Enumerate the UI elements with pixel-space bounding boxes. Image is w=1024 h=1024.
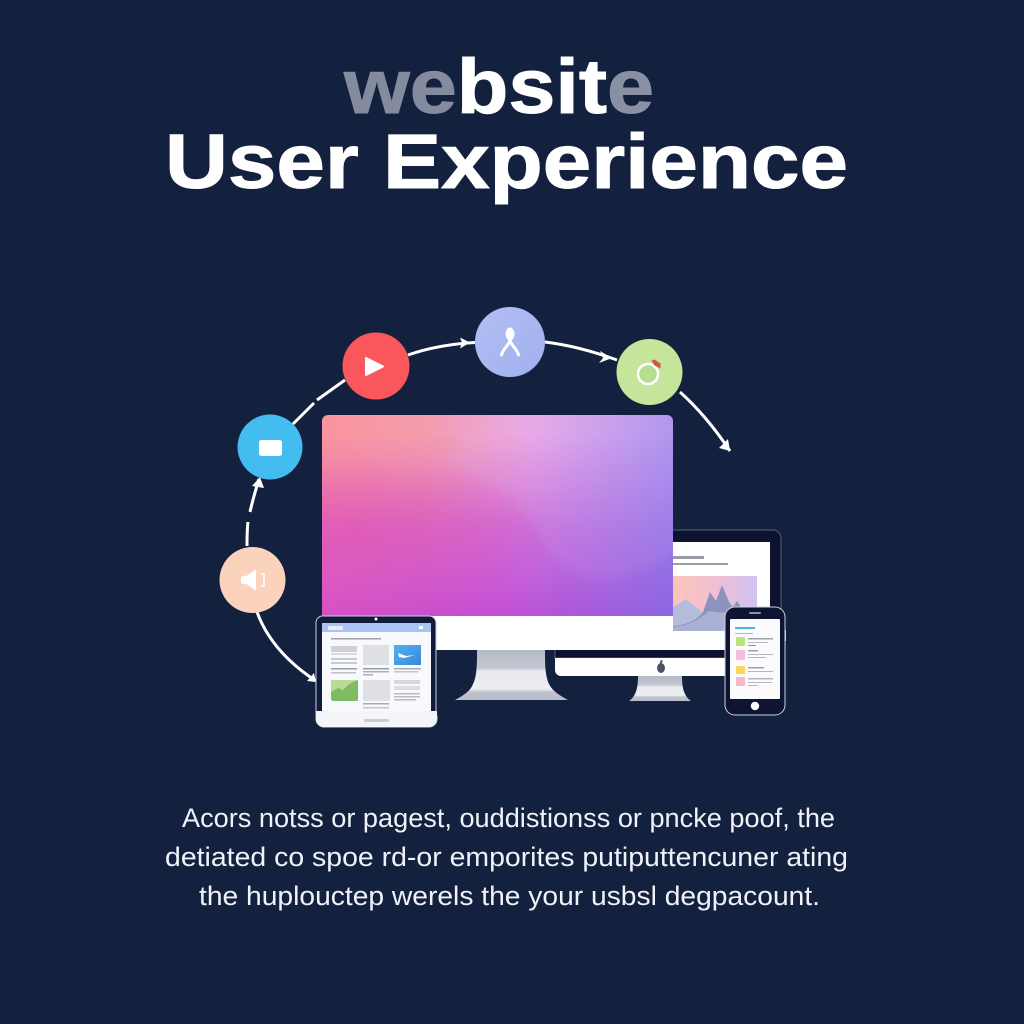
icon: red play circle	[342, 332, 410, 400]
title	[165, 44, 848, 205]
body line 2: detiated co spoe rd-or emporites putiputtencuner ating	[165, 842, 848, 872]
phone list	[735, 627, 773, 686]
monitor chin	[322, 606, 673, 650]
tablet base	[316, 711, 437, 727]
tablet camera	[374, 618, 378, 620]
icon: blue message circle	[238, 414, 302, 480]
phone side button	[784, 630, 786, 641]
icon: peach speaker circle	[220, 547, 286, 613]
icon: green ring circle	[616, 339, 682, 405]
phone speaker	[749, 612, 761, 614]
monitor body	[555, 530, 781, 658]
body text	[165, 803, 848, 911]
phone screen	[730, 619, 780, 699]
main monitor	[322, 400, 690, 700]
screen text lines	[673, 556, 728, 565]
tablet header	[322, 623, 431, 632]
monitor gradient screen	[322, 415, 673, 616]
monitor stand	[455, 650, 568, 700]
body line 1: Acors notss or pagest, ouddistionss or pncke poof, the	[182, 803, 835, 833]
back device: secondary monitor	[555, 530, 781, 701]
phone body	[725, 607, 785, 715]
phone home button	[751, 702, 759, 710]
flow arrows around the monitor	[247, 338, 730, 682]
tablet screen	[322, 623, 431, 711]
body line 3: the huplouctep werels the your usbsl degpacount.	[199, 881, 820, 911]
tablet content	[331, 638, 421, 708]
tablet body	[316, 616, 437, 727]
monitor chin	[555, 658, 745, 676]
monitor screen	[620, 542, 770, 650]
tablet	[316, 616, 437, 727]
monitor stand	[629, 676, 691, 701]
icon: periwinkle person circle	[475, 307, 545, 377]
screen chart	[673, 576, 757, 631]
logo	[657, 660, 665, 673]
title line: User Experience: User Experience	[165, 119, 848, 205]
tablet hinge	[364, 719, 389, 722]
title line: website: website	[343, 44, 654, 130]
phone	[725, 607, 786, 715]
